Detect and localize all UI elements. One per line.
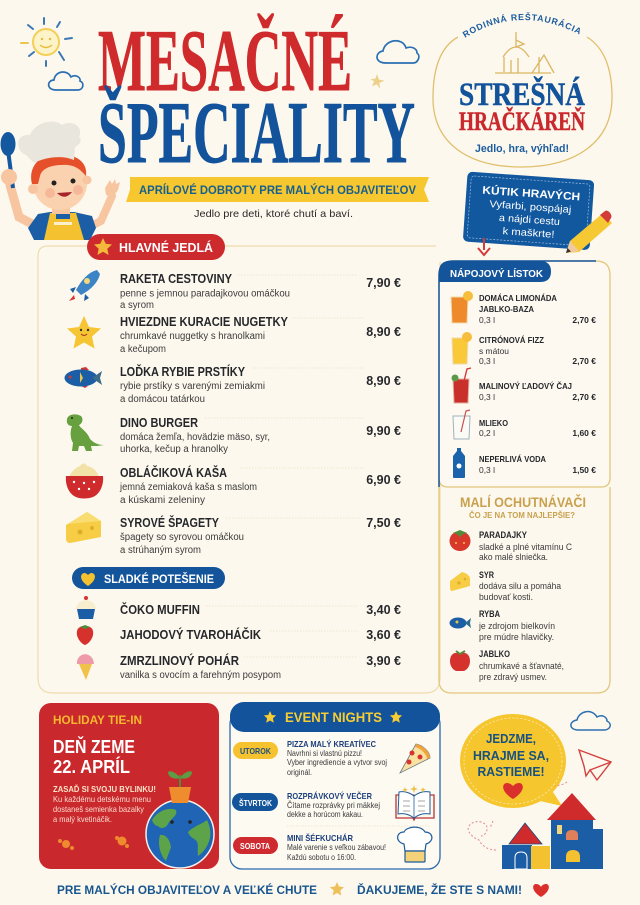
drink: citrónová fizz: CITRÓNOVÁ FIZZ: [479, 334, 544, 345]
drink: citrónová fizz: [452, 332, 596, 366]
menu item: obláčiková kaša: 6,90 €: [366, 473, 401, 487]
icon: dashed flight loop: [468, 782, 567, 850]
logo: Strešná Hračkáreň: RODINNÁ REŠTAURÁCIA: [462, 12, 580, 38]
title: ŠPECIALITY: [98, 85, 415, 182]
icon: pencil: [566, 211, 612, 253]
event: štvrtok: [232, 785, 434, 862]
sign: Kútik hravých: [463, 172, 612, 253]
drink: mlieko: 1,60 €: [572, 428, 596, 438]
event: sobota: MINI ŠÉFKUCHÁR: [287, 832, 353, 843]
icon: smiling sun: [21, 18, 72, 66]
logo: Strešná Hračkáreň: Jedlo, hra, výhľad!: [475, 143, 569, 155]
sign: Kútik hravých: k maškrte!: [502, 226, 555, 241]
menu item: dino burger: DINO BURGER: [120, 416, 198, 430]
menu item: syrové špagety: a strúhaným syrom: [120, 545, 201, 556]
item: ryba: pre múdre hlavičky.: [479, 632, 554, 642]
heading pill: Sladké potešenie: [72, 567, 225, 589]
heading: malí ochutnávači: ČO JE NA TOM NAJLEPŠIE?: [469, 509, 575, 520]
drink: limonáda: 0,3 l: [479, 315, 495, 325]
menu item: loďka rybie prstíky: [64, 364, 401, 405]
drink: limonáda: JABLKO-BAZA: [479, 304, 534, 314]
drink: neperlivá voda: 1,50 €: [572, 465, 596, 475]
menu item: syrové špagety: [66, 512, 401, 556]
sign: Kútik hravých: a nájdi cestu: [499, 213, 560, 228]
menu item: obláčiková kaša: [66, 463, 401, 506]
item: ryba: RYBA: [479, 609, 500, 619]
sign: Kútik hravých: Vyfarbi, pospájaj: [489, 199, 572, 216]
item: paradajky: sladké a plné vitamínu C: [479, 542, 572, 552]
icon: pizza slice: [400, 744, 430, 773]
menu item: jahodový tvaroháčik: JAHODOVÝ TVAROHÁČIK: [120, 627, 261, 642]
arrow: red pointer to drinks: [478, 238, 490, 255]
menu item: obláčiková kaša: jemná zemiaková kaša s maslom: [119, 482, 257, 493]
menu item: hviezdne nugetky: a kečupom: [120, 344, 166, 355]
panel: holiday tie-in: [39, 703, 219, 869]
heading pill: Hlavné jedlá: [87, 234, 225, 260]
icon: orange leaf splats: [58, 836, 129, 850]
illustration: toy castle: [502, 793, 603, 869]
title: MESAČNÉ: [98, 13, 352, 110]
footer tagline: PRE MALÝCH OBJAVITEĽOV A VEĽKÉ CHUTE: [57, 882, 317, 897]
heading: drinks: NÁPOJOVÝ LÍSTOK: [450, 267, 544, 280]
panel: malí ochutnávači: [439, 487, 610, 693]
menu item: obláčiková kaša: a kúskami zeleniny: [120, 495, 205, 506]
drink: mlieko: 0,2 l: [479, 428, 495, 438]
drink: neperlivá voda: [453, 448, 596, 478]
menu item: raketa cestoviny: a syrom: [120, 300, 154, 311]
item: jablko: [450, 649, 564, 682]
menu item: loďka rybie prstíky: LOĎKA RYBIE PRSTÍKY: [120, 364, 246, 379]
speech bubble: Jedzme, hrajme sa, rastieme: RASTIEME!: [478, 765, 544, 779]
drink: malinový ľadový čaj: MALINOVÝ ĽADOVÝ ČAJ: [479, 380, 572, 391]
logo: Strešná Hračkáreň: HRAČKÁREŇ: [459, 107, 585, 136]
item: syr: [450, 570, 561, 602]
illustration: chef boy: [0, 122, 120, 240]
speech bubble: Jedzme, hrajme sa, rastieme: JEDZME,: [486, 732, 536, 746]
menu item: hviezdne nugetky: 8,90 €: [366, 325, 401, 339]
menu item: dino burger: uhorka, kečup a hranolky: [120, 444, 228, 455]
event: utorok: Vyber ingrediencie a vytvor svoj: [287, 758, 387, 767]
heading: drinks: [439, 261, 551, 282]
drink: limonáda: [451, 291, 596, 325]
event: štvrtok: ROZPRÁVKOVÝ VEČER: [287, 790, 372, 801]
sign: Kútik hravých: KÚTIK HRAVÝCH: [482, 184, 581, 203]
icon: cloud right: [377, 41, 419, 63]
heading pill: Hlavné jedlá: HLAVNÉ JEDLÁ: [119, 240, 213, 255]
panel: event nights: [57, 702, 611, 897]
icon: earth with plant pot: [146, 771, 214, 868]
item: jablko: pre zdravý usmev.: [479, 672, 547, 682]
panel: holiday tie-in: HOLIDAY TIE-IN: [53, 715, 142, 727]
event: sobota: SOBOTA: [240, 841, 270, 851]
event: štvrtok: dekke a horúcom kakau.: [287, 810, 363, 819]
menu item: syrové špagety: 7,50 €: [366, 516, 401, 530]
drink: limonáda: 2,70 €: [572, 315, 596, 325]
event: utorok: PIZZA MALÝ KREATÍVEC: [287, 738, 376, 749]
event: utorok: originál.: [287, 768, 312, 777]
banner: yellow subtitle ribbon: APRÍLOVÉ DOBROTY PRE MALÝCH OBJAVITEĽOV: [139, 184, 416, 197]
menu item: zmrzlinový pohár: ZMRZLINOVÝ POHÁR: [120, 653, 239, 668]
item: ryba: [450, 609, 555, 642]
menu item: syrové špagety: SYROVÉ ŠPAGETY: [120, 515, 220, 530]
menu item: čoko muffin: 3,40 €: [366, 603, 401, 617]
logo: Strešná Hračkáreň: STREŠNÁ: [459, 75, 585, 113]
icon: chef hat: [398, 827, 432, 862]
panel: holiday tie-in: DEŇ ZEME: [53, 736, 135, 757]
speech bubble: Jedzme, hrajme sa, rastieme: [460, 714, 566, 808]
event: sobota: Malé varenie s veľkou zábavou!: [287, 843, 386, 852]
drink: malinový ľadový čaj: 0,3 l: [479, 392, 495, 402]
menu item: hviezdne nugetky: chrumkavé nuggetky s hranolkami: [120, 331, 265, 342]
heading: malí ochutnávači: MALÍ OCHUTNÁVAČI: [460, 493, 586, 510]
menu item: dino burger: 9,90 €: [366, 424, 401, 438]
event: sobota: [233, 827, 432, 862]
event: sobota: Každú sobotu o 16:00.: [287, 853, 356, 862]
icon: cloud left: [49, 72, 83, 90]
title: [98, 13, 415, 182]
item: jablko: JABLKO: [479, 649, 510, 659]
icon: paper plane: [579, 750, 611, 780]
item: ryba: je zdrojom bielkovín: [478, 621, 555, 631]
heading: event nights: [230, 702, 440, 732]
drink: citrónová fizz: 0,3 l: [479, 356, 495, 366]
panel: holiday tie-in: 22. APRÍL: [53, 756, 130, 777]
drink: limonáda: DOMÁCA LIMONÁDA: [479, 293, 557, 303]
logo: Strešná Hračkáreň: [432, 12, 613, 168]
icon: open book: [396, 785, 434, 820]
panel: holiday tie-in: a malý kvetináčik.: [53, 814, 112, 824]
heading pill: Sladké potešenie: SLADKÉ POTEŠENIE: [104, 573, 214, 586]
tagline: Jedlo pre deti, ktoré chutí a baví.: [194, 208, 353, 220]
menu item: čoko muffin: ČOKO MUFFIN: [120, 602, 200, 617]
item: syr: dodáva silu a pomáha: [479, 581, 561, 591]
drink: mlieko: MLIEKO: [479, 418, 508, 428]
menu item: raketa cestoviny: [69, 270, 401, 311]
event: utorok: UTOROK: [240, 746, 272, 756]
drink: citrónová fizz: 2,70 €: [572, 356, 596, 366]
item: syr: SYR: [479, 570, 494, 580]
drink: citrónová fizz: s mátou: [479, 346, 509, 356]
item: jablko: chrumkavé a šťavnaté,: [479, 661, 564, 671]
menu item: čoko muffin: [76, 596, 401, 619]
drink: malinový ľadový čaj: 2,70 €: [572, 392, 596, 402]
menu item: zmrzlinový pohár: 3,90 €: [366, 654, 401, 668]
panel: main menu: [38, 246, 440, 693]
menu item: obláčiková kaša: OBLÁČIKOVÁ KAŠA: [120, 465, 227, 480]
event: štvrtok: Čítame rozprávky pri mäkkej: [287, 801, 380, 810]
drink: malinový ľadový čaj: [452, 368, 596, 403]
item: paradajky: ako malé slniečka.: [479, 552, 548, 562]
drink: neperlivá voda: 0,3 l: [479, 465, 495, 475]
footer tagline: [57, 882, 549, 897]
panel: drinks: [439, 261, 610, 487]
item: paradajky: [450, 530, 572, 562]
heading: event nights: EVENT NIGHTS: [285, 709, 382, 725]
menu item: raketa cestoviny: RAKETA CESTOVINY: [120, 272, 233, 286]
menu item: raketa cestoviny: 7,90 €: [366, 276, 401, 290]
menu item: jahodový tvaroháčik: 3,60 €: [366, 628, 401, 642]
menu item: hviezdne nugetky: [67, 315, 401, 355]
item: syr: budovať kosti.: [479, 592, 533, 602]
drink: mlieko: [453, 410, 596, 439]
icon: small gold star: [370, 74, 385, 89]
menu item: loďka rybie prstíky: rybie prstíky s varenými zemiakmi: [120, 381, 265, 392]
panel: holiday tie-in: dostaneš semienka bazalky: [53, 804, 145, 814]
menu item: hviezdne nugetky: HVIEZDNE KURACIE NUGETKY: [120, 315, 289, 329]
heading: malí ochutnávači: [460, 493, 586, 520]
menu item: loďka rybie prstíky: 8,90 €: [366, 374, 401, 388]
panel: holiday tie-in: Ku každému detskému menu: [53, 794, 151, 804]
speech bubble: Jedzme, hrajme sa, rastieme: HRAJME SA,: [473, 749, 549, 763]
menu item: syrové špagety: špagety so syrovou omáčkou: [120, 532, 244, 543]
panel: holiday tie-in: ZASAĎ SI SVOJU BYLINKU!: [53, 783, 156, 794]
menu item: jahodový tvaroháčik: [77, 625, 401, 645]
menu item: raketa cestoviny: penne s jemnou paradajkovou omáčkou: [120, 288, 290, 300]
event: utorok: Navrhni si vlastnú pizzu!: [287, 749, 362, 758]
item: paradajky: PARADAJKY: [479, 530, 527, 540]
banner: yellow subtitle ribbon: [126, 177, 429, 202]
drink: neperlivá voda: NEPERLIVÁ VODA: [479, 454, 546, 464]
menu item: zmrzlinový pohár: vanilka s ovocím a farehným posypom: [120, 670, 281, 681]
menu item: dino burger: [67, 414, 401, 455]
menu item: dino burger: domáca žemľa, hovädzie mäso, syr,: [120, 432, 270, 443]
footer tagline: ĎAKUJEME, ŽE STE S NAMI!: [357, 882, 522, 897]
menu item: loďka rybie prstíky: a domácou tatárkou: [120, 394, 205, 405]
event: utorok: [233, 738, 430, 777]
event: štvrtok: ŠTVRTOK: [239, 797, 273, 808]
menu item: zmrzlinový pohár: [77, 653, 401, 681]
icon: cloud bottom right: [571, 712, 610, 730]
